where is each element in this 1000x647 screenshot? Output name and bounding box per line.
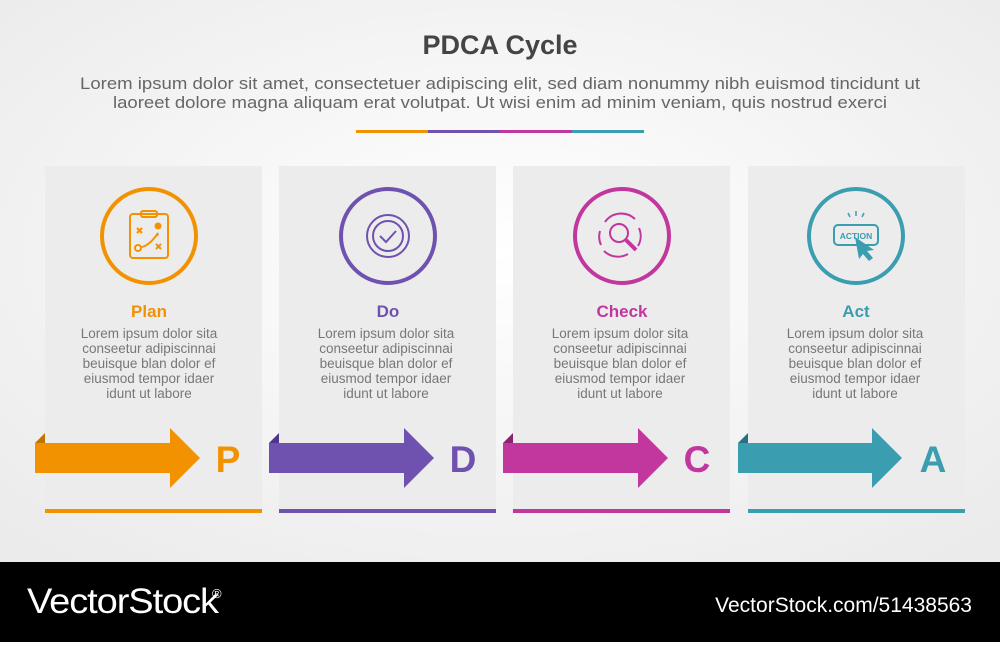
panel: plan: eiusmod tempor idaer [84, 371, 215, 386]
icon: check badge [367, 215, 409, 257]
footer bar [0, 562, 1000, 642]
arrow [269, 428, 434, 488]
panel: check: beuisque blan dolor ef [554, 356, 687, 371]
panel: do: D [450, 439, 476, 480]
panel: plan: Lorem ipsum dolor sita [81, 326, 218, 341]
panel: do: eiusmod tempor idaer [321, 371, 452, 386]
panel: check: idunt ut labore [577, 386, 663, 401]
panel: do: beuisque blan dolor ef [320, 356, 453, 371]
icon: action button: ACTION [840, 231, 872, 241]
panel: act: conseetur adipiscinnai [788, 341, 922, 356]
panel: do: idunt ut labore [343, 386, 429, 401]
panel: act [738, 166, 965, 513]
subtitle text [80, 74, 920, 112]
arrow [35, 428, 200, 488]
panel: check: C [684, 439, 710, 480]
arrow [738, 428, 902, 488]
panel: check: eiusmod tempor idaer [555, 371, 686, 386]
panel: check: Lorem ipsum dolor sita [552, 326, 689, 341]
panel: do: Lorem ipsum dolor sita [318, 326, 455, 341]
panel: act: idunt ut labore [812, 386, 898, 401]
panel: check: Check [596, 302, 648, 321]
footer bar: ® [212, 586, 222, 601]
panel: act: beuisque blan dolor ef [789, 356, 922, 371]
panel: do: conseetur adipiscinnai [319, 341, 453, 356]
subtitle text: laoreet dolore magna aliquam erat volutpat. Ut wisi enim ad minim veniam, quis nostrud exerci [113, 93, 887, 112]
panel: act: Act [842, 302, 870, 321]
panel: act: Lorem ipsum dolor sita [787, 326, 924, 341]
subtitle text: Lorem ipsum dolor sit amet, consectetuer adipiscing elit, sed diam nonummy nibh euismod tincidunt ut [80, 74, 920, 93]
panel: do: Do [377, 302, 399, 321]
footer bar: VectorStock [27, 582, 220, 621]
icon: magnifier cycle [599, 214, 641, 257]
panel: plan: beuisque blan dolor ef [83, 356, 216, 371]
panel: plan: P [216, 439, 240, 480]
icon: action button [834, 211, 878, 261]
panel: plan: Plan [131, 302, 167, 321]
panel: plan: idunt ut labore [106, 386, 192, 401]
arrow [503, 428, 668, 488]
panel: do [269, 166, 496, 513]
panel: plan [35, 166, 262, 513]
panel: act: eiusmod tempor idaer [790, 371, 921, 386]
panel: act: A [920, 439, 946, 480]
panel: check [503, 166, 730, 513]
icon: clipboard [130, 211, 168, 258]
title: PDCA Cycle [422, 30, 578, 60]
color divider [356, 130, 644, 133]
footer bar: VectorStock.com/51438563 [715, 594, 972, 617]
panel: plan: conseetur adipiscinnai [82, 341, 216, 356]
panel: check: conseetur adipiscinnai [553, 341, 687, 356]
